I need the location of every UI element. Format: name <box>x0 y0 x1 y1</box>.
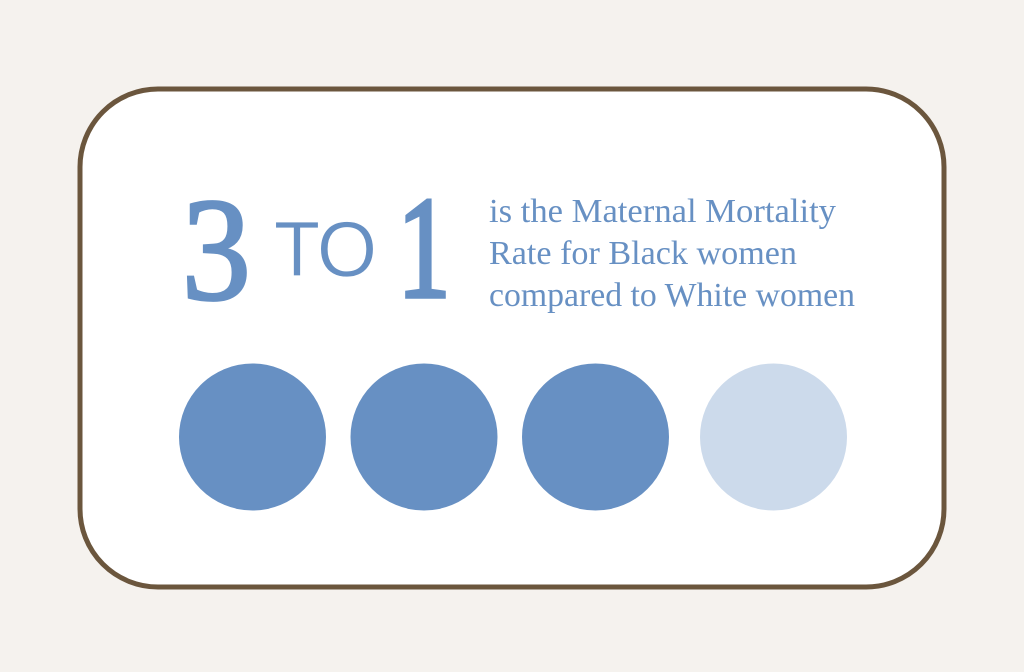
headline: 3 to 1 <box>182 168 451 331</box>
headline: 3 to 1: O <box>317 205 377 293</box>
description text: Rate for Black women <box>489 235 797 272</box>
description text: compared to White women <box>489 277 855 314</box>
headline: 3 to 1: 1 <box>398 168 450 328</box>
ratio circles <box>179 364 847 510</box>
headline: 3 to 1: T <box>274 205 320 293</box>
headline: 3 to 1: 3 <box>182 168 251 331</box>
panel: card <box>80 89 944 587</box>
description text <box>489 193 855 314</box>
description text: is the Maternal Mortality <box>489 193 836 230</box>
